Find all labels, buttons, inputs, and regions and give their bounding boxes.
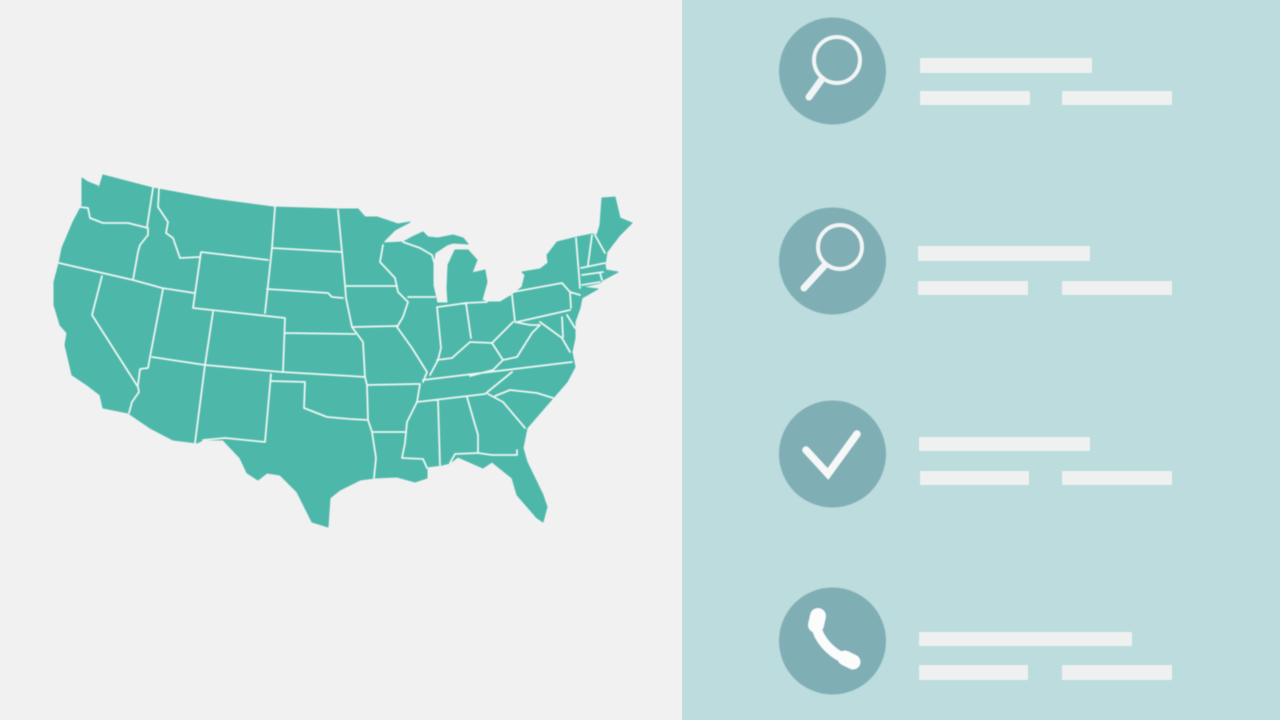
icon: magnifying glass — [779, 18, 886, 124]
text placeholder bars — [919, 437, 1172, 485]
map: United States — [54, 175, 632, 527]
list row 3: confirmation — [779, 400, 1172, 508]
panel: right list background — [682, 0, 1280, 720]
list row 1: search — [779, 18, 1172, 124]
panel: left background — [0, 0, 682, 720]
list row 2: search — [779, 208, 1172, 314]
icon: telephone handset — [779, 588, 886, 694]
text placeholder bars — [919, 632, 1172, 680]
list row 4: phone — [779, 588, 1172, 694]
map: country silhouette — [54, 175, 632, 527]
text placeholder bars — [918, 246, 1172, 295]
icon: magnifying glass — [779, 208, 886, 314]
map: state borders — [59, 188, 605, 478]
text placeholder bars — [920, 58, 1172, 105]
icon: check mark — [779, 400, 886, 508]
